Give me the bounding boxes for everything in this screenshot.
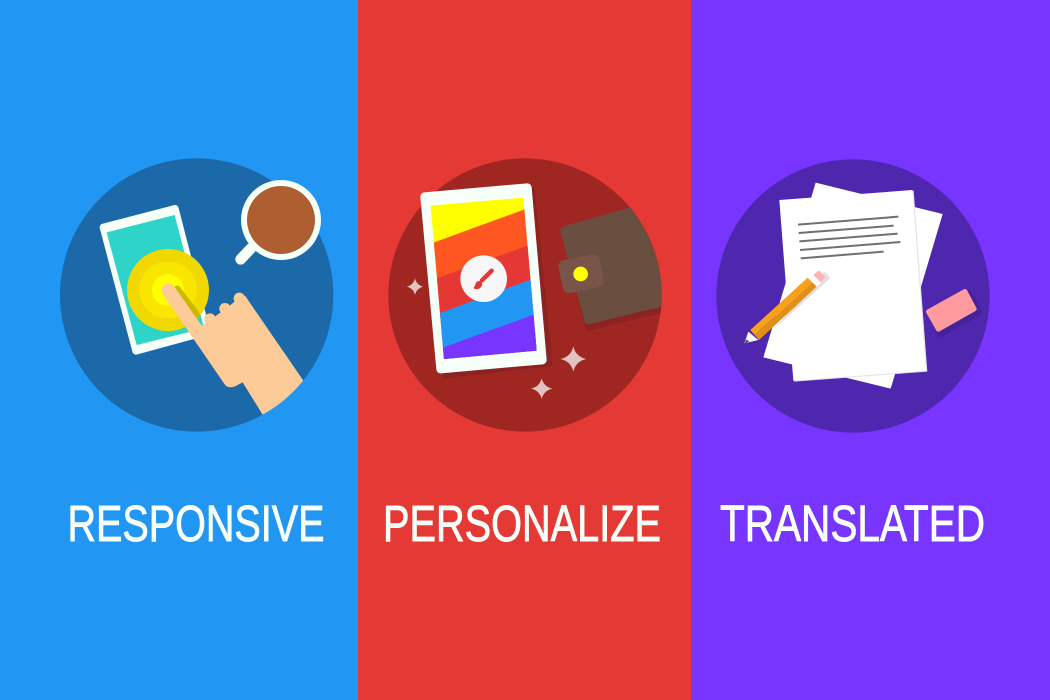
icon: pencil — [744, 270, 830, 344]
illustration: personalize — [388, 158, 680, 432]
icon: yellow touch ripple — [127, 249, 209, 331]
illustration: responsive — [60, 158, 333, 432]
icon: tablet with colour stripes — [425, 187, 552, 378]
circle backdrop — [388, 158, 662, 432]
front sheet shadow — [780, 191, 927, 382]
icon: sparkle medium — [531, 378, 552, 399]
icon: tablet — [103, 209, 207, 351]
back sheet of paper — [763, 183, 943, 389]
icon: pointing hand — [162, 284, 304, 415]
panel: translated background — [691, 0, 1050, 700]
icon: eraser — [928, 291, 980, 335]
icon: coffee cup — [241, 180, 321, 260]
circle backdrop — [60, 158, 333, 432]
icon: sparkle small left — [407, 279, 423, 295]
text lines on paper — [798, 217, 900, 258]
icon: sparkle large — [560, 346, 586, 372]
heading: translated: TRANSLATED — [720, 495, 985, 552]
icon: wallet — [558, 208, 662, 330]
circle backdrop — [716, 159, 990, 433]
front sheet of paper — [779, 190, 926, 381]
heading: personalize: PERSONALIZE — [383, 495, 661, 552]
icon: paintbrush button — [460, 255, 507, 302]
heading: responsive: RESPONSIVE — [68, 495, 324, 552]
panel: responsive background — [0, 0, 358, 700]
panel: personalize background — [358, 0, 691, 700]
wallet clasp — [557, 253, 605, 294]
illustration: translated — [716, 159, 990, 433]
